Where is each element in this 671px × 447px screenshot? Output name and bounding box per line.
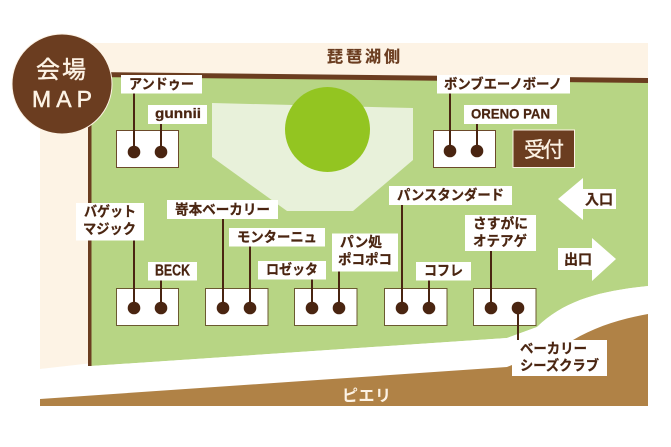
badge: venue map: 会場: [36, 57, 86, 84]
arrow: exit: [558, 238, 616, 281]
green circle: [285, 87, 370, 172]
label: BECK: BECK: [155, 262, 190, 280]
label: Sasugani Oteage: さすがに: [473, 216, 528, 232]
booth: Sakimoto Bakery and Montagne: [206, 217, 268, 326]
label: Montagne: モンターニュ: [237, 229, 317, 245]
booth: Rosetta and Pan-dokoro Poko Poko: [294, 269, 357, 326]
label: Bom Bueno Bono: ボンブエーノボーノ: [444, 76, 562, 92]
label: Andoo: アンドゥー: [129, 76, 194, 92]
label: Baguette Magic: [76, 203, 144, 240]
heading: lake side: 琵琶湖側: [327, 48, 400, 66]
plaza shape: [212, 103, 413, 211]
label: Coffret: [416, 262, 471, 280]
reception: 受付: [524, 139, 564, 162]
arrow: entrance: 入口: [585, 192, 613, 208]
label: Sasugani Oteage: [465, 215, 536, 251]
reception: [513, 130, 574, 168]
label: Pan Standard: パンスタンダード: [397, 187, 504, 203]
badge: venue map: [12, 34, 112, 134]
arrow: exit: 出口: [564, 252, 592, 268]
label: Pan-dokoro Poko Poko: [332, 234, 398, 272]
label: Baguette Magic: バゲット: [84, 204, 136, 220]
label: Bakery Seeds Club: [512, 340, 607, 376]
label: Pan-dokoro Poko Poko: ポコポコ: [338, 252, 392, 268]
panel: brown Pieri ground: [40, 314, 648, 406]
badge: venue map: MAP: [32, 86, 92, 112]
label: Bakery Seeds Club: シーズクラブ: [520, 358, 599, 374]
label: gunnii: gunnii: [155, 105, 201, 121]
booth: Bom Bueno and Oreno Pan: [434, 90, 496, 168]
background: cream ground: [40, 43, 648, 369]
white road: [40, 286, 648, 399]
arrow: entrance: [558, 178, 616, 220]
label: Oreno Pan: ORENO PAN: [471, 106, 550, 122]
heading: Pieri: ピエリ: [342, 387, 391, 405]
booth: Andoo and gunnii: [116, 90, 178, 168]
label: Sakimoto Bakery: 嵜本ベーカリー: [175, 202, 270, 218]
label: Sasugani Oteage: オテアゲ: [473, 233, 527, 249]
label: Baguette Magic: マジック: [83, 221, 136, 237]
booth: Sasugani Oteage and Bakery Seeds Club: [474, 249, 536, 342]
left wall line: [88, 72, 92, 366]
booth: Baguette Magic and BECK: [116, 238, 178, 326]
panel: green venue lawn: [90, 75, 648, 366]
top wall line: [88, 72, 648, 83]
label: Bakery Seeds Club: ベーカリー: [520, 340, 587, 356]
label: gunnii: [148, 105, 207, 124]
label: Pan-dokoro Poko Poko: パン処: [340, 234, 382, 250]
booth: Pan Standard and Coffret: [384, 203, 447, 326]
label: Rosetta: ロゼッタ: [266, 262, 318, 278]
label: Coffret: コフレ: [424, 262, 463, 278]
